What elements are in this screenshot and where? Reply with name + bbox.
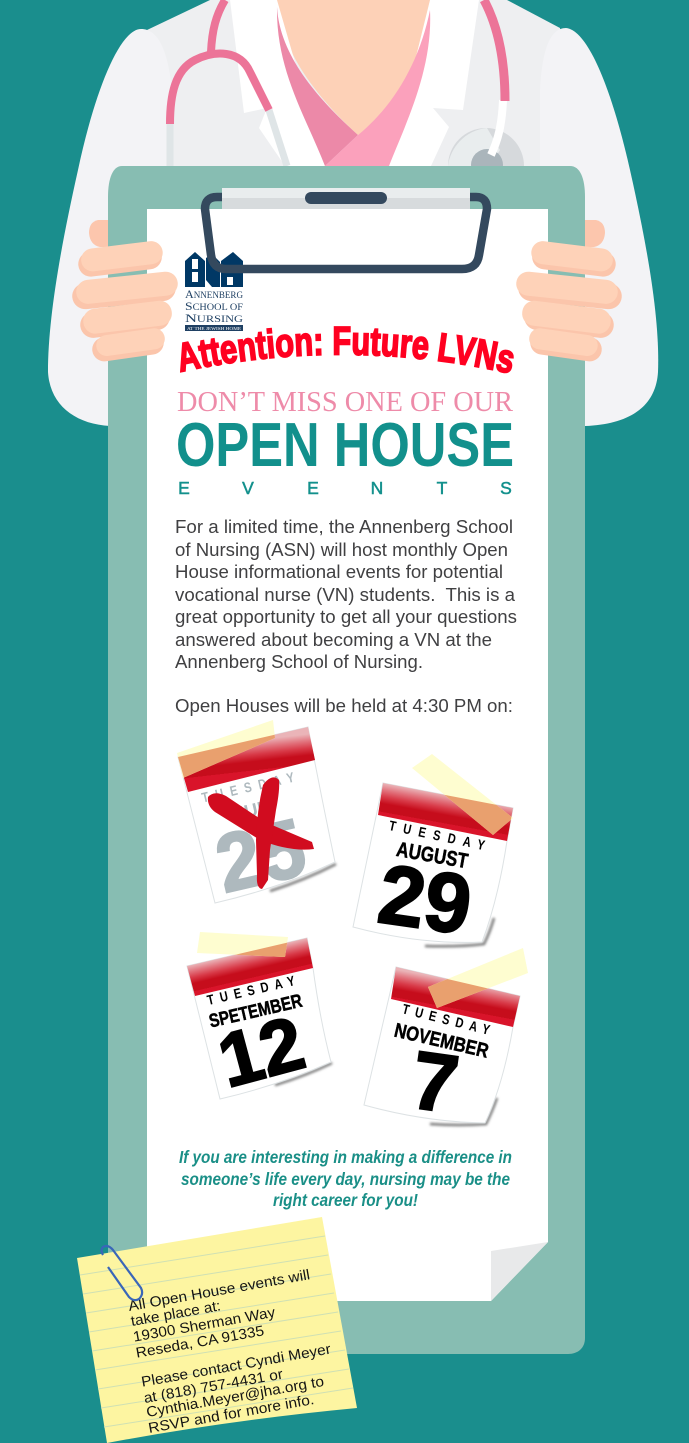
calendar: August 29: TUESDAY bbox=[388, 818, 487, 853]
left sleeve bbox=[48, 29, 172, 426]
body paragraph: House informational events for potential bbox=[175, 562, 503, 582]
heading: events: N bbox=[371, 478, 383, 498]
right hand bbox=[515, 220, 623, 363]
logo bbox=[185, 252, 244, 331]
heading: attention: Attention: Future LVNs bbox=[180, 326, 514, 374]
calendar: September 12 bbox=[187, 932, 332, 1104]
finger 1 bbox=[77, 240, 164, 278]
note text: take place at: bbox=[130, 1298, 222, 1330]
calendar: November 7: NOVEMBER bbox=[392, 1020, 491, 1063]
calendar: September 12: TUESDAY bbox=[206, 973, 297, 1008]
logo line 1: ANNENBERG bbox=[185, 287, 244, 301]
heading: open house: OPEN HOUSE bbox=[176, 410, 514, 480]
left hand bbox=[71, 220, 179, 363]
calendar: July 25 crossed out: JULY bbox=[232, 794, 281, 824]
calendar: November 7: 7 bbox=[406, 1035, 464, 1131]
heading: events: E bbox=[307, 478, 319, 498]
finger 2 bbox=[71, 271, 179, 310]
calendar: August 29: AUGUST bbox=[395, 838, 470, 873]
finger 2 bbox=[515, 271, 623, 310]
note text: All Open House events will bbox=[127, 1267, 311, 1315]
italic call to action: right career for you! bbox=[273, 1190, 418, 1210]
body paragraph: vocational nurse (VN) students. This is a bbox=[175, 585, 516, 605]
note text: RSVP and for more info. bbox=[147, 1392, 315, 1437]
body paragraph: For a limited time, the Annenberg School bbox=[175, 517, 513, 537]
heading: events: S bbox=[500, 478, 512, 498]
body paragraph bbox=[175, 517, 517, 672]
clip wire bbox=[205, 197, 487, 269]
nurse figure bbox=[48, 0, 658, 426]
paper fold bbox=[491, 1242, 548, 1301]
calendar: July 25 crossed out: 25 bbox=[208, 802, 314, 910]
heading: don't miss: DON’T MISS ONE OF OUR bbox=[177, 387, 513, 418]
open house time: Open Houses will be held at 4:30 PM on: bbox=[175, 696, 513, 716]
lower gray tube left bbox=[166, 124, 174, 166]
scrub right panel bbox=[325, 10, 430, 166]
coat body bbox=[130, 0, 570, 200]
chest piece disc bbox=[448, 128, 524, 204]
italic call to action: If you are interesting in making a difference in bbox=[179, 1147, 512, 1167]
clip bar top bbox=[222, 188, 470, 198]
calendar: August 29: 29 bbox=[373, 846, 477, 952]
note text: Reseda, CA 91335 bbox=[135, 1323, 265, 1362]
italic call to action bbox=[179, 1147, 512, 1210]
note text: Cynthia.Meyer@jha.org to bbox=[145, 1374, 325, 1421]
pink tube loop bbox=[170, 54, 269, 124]
note rule lines bbox=[80, 1236, 353, 1427]
lower gray tube middle bbox=[269, 110, 287, 166]
body paragraph: great opportunity to get all your questions bbox=[175, 607, 517, 627]
note text bbox=[127, 1267, 332, 1437]
calendar: November 7: TUESDAY bbox=[401, 1001, 492, 1038]
logo bar bbox=[185, 325, 243, 331]
calendar: September 12: SPETEMBER bbox=[207, 991, 305, 1033]
sticky note bbox=[77, 1217, 357, 1443]
stethoscope chest piece bbox=[448, 128, 524, 204]
heading: events: T bbox=[437, 478, 448, 498]
logo windows bbox=[192, 259, 233, 285]
logo line 3: N URSING bbox=[185, 311, 244, 325]
skin bbox=[277, 0, 430, 135]
stethoscope tubes bbox=[170, 0, 505, 166]
italic call to action: someone’s life every day, nursing may be the bbox=[181, 1169, 510, 1189]
finger 3 bbox=[521, 299, 615, 339]
calendar: September 12: 12 bbox=[210, 1000, 313, 1104]
body paragraph: answered about becoming a VN at the bbox=[175, 630, 492, 650]
logo houses bbox=[185, 252, 243, 287]
pink tube up left bbox=[211, 0, 225, 52]
body paragraph: Annenberg School of Nursing. bbox=[175, 652, 423, 672]
thumb bbox=[89, 220, 108, 247]
heading: events: E bbox=[178, 478, 190, 498]
logo wordmark bbox=[185, 287, 244, 325]
clip pill bbox=[305, 192, 387, 204]
note text: 19300 Sherman Way bbox=[132, 1305, 277, 1346]
heading: events: V bbox=[242, 478, 254, 498]
pink tube right bbox=[484, 0, 505, 101]
paperclip bbox=[102, 1246, 142, 1300]
logo line 2: SCHOOL OF bbox=[185, 299, 243, 313]
note text: at (818) 757-4431 or bbox=[143, 1367, 284, 1407]
calendar: July 25 crossed out bbox=[177, 720, 336, 910]
chest piece highlight bbox=[448, 128, 500, 166]
calendar: November 7 bbox=[364, 948, 528, 1131]
scrub left panel bbox=[277, 7, 358, 166]
right sleeve bbox=[540, 28, 658, 426]
white lapels bbox=[230, 0, 479, 166]
note paper bbox=[77, 1217, 357, 1443]
thumb bbox=[585, 220, 605, 247]
calendar: August 29 bbox=[353, 754, 513, 952]
calendar: July 25 crossed out: TUESDAY bbox=[200, 769, 296, 806]
clipboard clip bbox=[205, 188, 487, 269]
clip bar bottom bbox=[222, 198, 470, 209]
chest piece cap bbox=[471, 149, 503, 181]
lower tube right bbox=[491, 100, 503, 155]
note text: Please contact Cyndi Meyer bbox=[140, 1342, 332, 1391]
clipboard board bbox=[108, 166, 585, 1354]
finger 1 bbox=[530, 240, 617, 278]
finger 4 bbox=[528, 327, 603, 363]
finger 4 bbox=[91, 327, 166, 363]
finger 3 bbox=[79, 299, 173, 339]
body paragraph: of Nursing (ASN) will host monthly Open bbox=[175, 540, 508, 560]
logo bar text: AT THE JEWISH HOME bbox=[187, 326, 241, 331]
paper sheet bbox=[147, 209, 548, 1301]
